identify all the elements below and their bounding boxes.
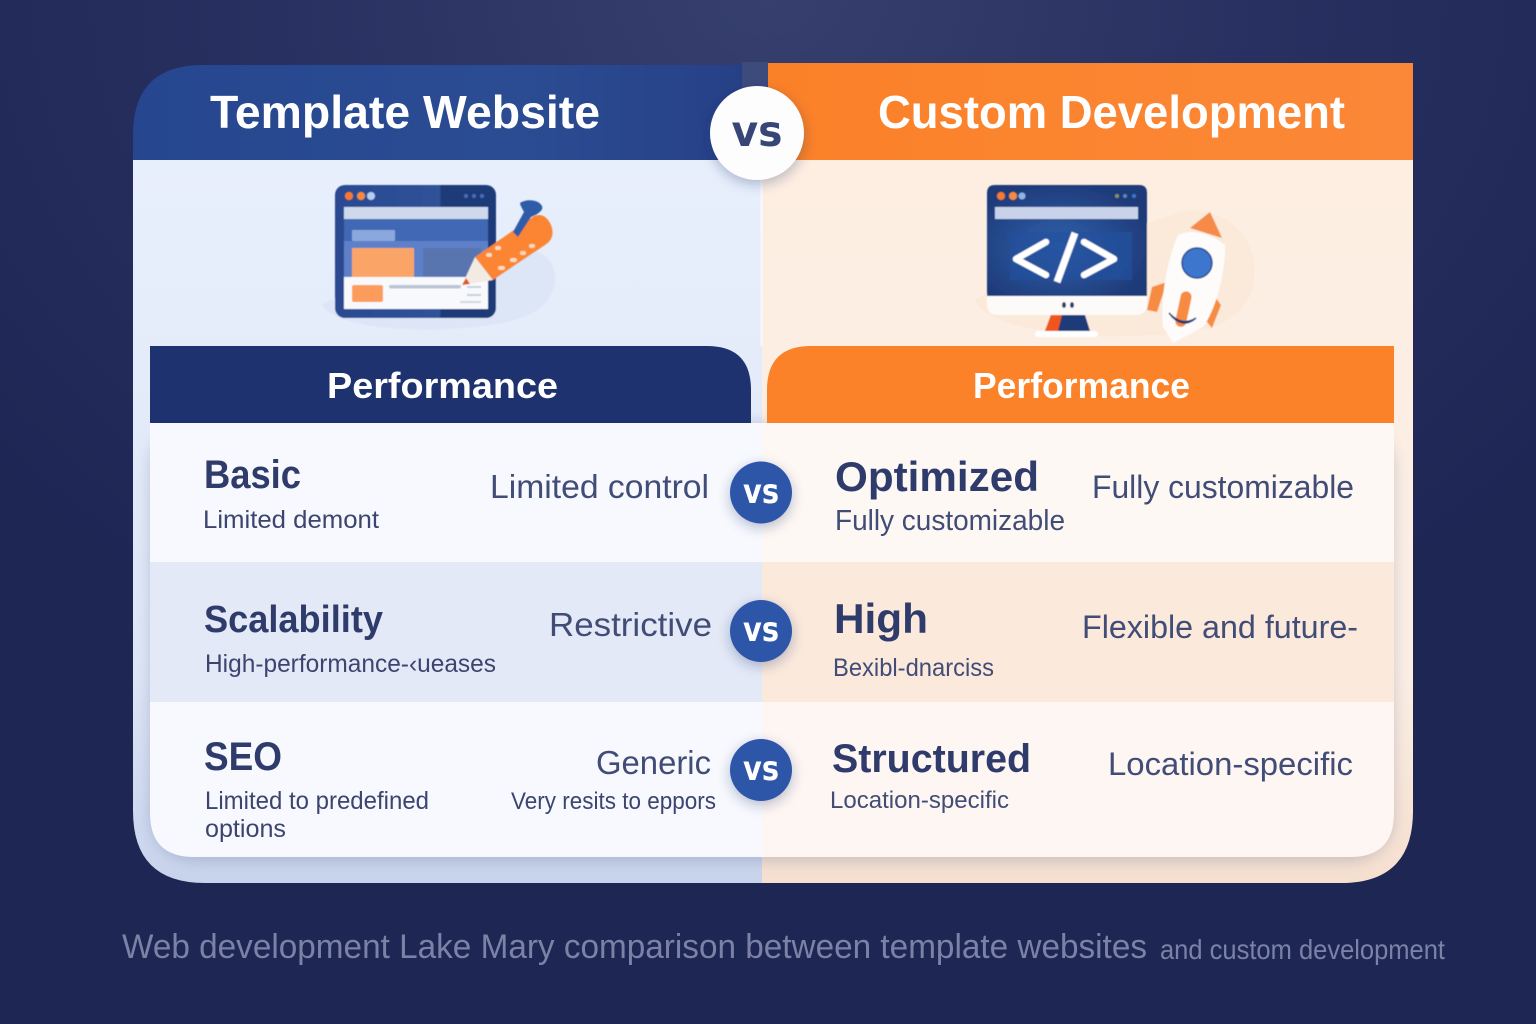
row background: optimized xyxy=(762,423,1394,562)
icon: code monitor and rocket xyxy=(975,185,1254,343)
row text: scalability: High-performance-‹ueases xyxy=(205,650,496,678)
row text: basic: Basic xyxy=(204,453,301,497)
row text: seo xyxy=(204,735,716,843)
label: performance left: Performance xyxy=(327,365,558,406)
left panel background xyxy=(133,160,762,883)
subheader: performance right xyxy=(767,346,1394,423)
row vs badge: performance: vs xyxy=(743,472,779,512)
row vs badge: seo: vs xyxy=(743,749,779,789)
row text: high: Flexible and future- xyxy=(1082,609,1358,645)
row background: high xyxy=(762,562,1394,702)
row text: scalability: Scalability xyxy=(204,599,383,641)
row text: structured: Location-specific xyxy=(1108,746,1353,782)
center seam xyxy=(760,160,763,346)
label: performance right: Performance xyxy=(973,365,1190,406)
row text: high xyxy=(833,595,1358,682)
header seam patch xyxy=(742,62,768,92)
row text: seo: Limited to predefined xyxy=(205,787,429,815)
row background: scalability xyxy=(150,562,762,702)
row text: high: Bexibl-dnarciss xyxy=(833,654,994,682)
left header band xyxy=(133,65,768,160)
row vs badge: performance xyxy=(730,462,792,524)
row vs badge: scalability xyxy=(730,600,792,662)
row text: optimized: Fully customizable xyxy=(1092,469,1354,505)
heading: custom development: Custom Development xyxy=(878,86,1345,138)
caption: and custom development xyxy=(1160,934,1445,965)
row text: structured: Location-specific xyxy=(830,787,1009,814)
right panel background xyxy=(762,160,1413,883)
row background: structured xyxy=(762,702,1394,857)
row text: basic: Limited control xyxy=(490,468,709,505)
comparison table shadow xyxy=(150,423,1394,861)
header vs badge xyxy=(710,86,804,180)
row background: basic xyxy=(150,423,762,562)
row text: optimized xyxy=(835,453,1354,537)
row text: basic xyxy=(203,453,709,534)
row text: seo: SEO xyxy=(204,735,282,779)
header vs badge: vs xyxy=(732,107,782,157)
panel: custom development xyxy=(762,63,1413,883)
row vs badge: scalability: vs xyxy=(743,610,779,650)
row text: structured xyxy=(830,737,1353,814)
row text: structured: Structured xyxy=(832,737,1031,781)
right header band xyxy=(768,63,1413,160)
caption: Web development Lake Mary comparison between template websites xyxy=(122,928,1147,966)
row vs badge: seo xyxy=(730,739,792,801)
row text: basic: Limited demont xyxy=(203,506,379,534)
row background: seo xyxy=(150,702,762,857)
row text: scalability xyxy=(204,599,712,678)
subheader: performance left xyxy=(150,346,751,423)
comparison rows right xyxy=(762,346,1394,857)
row text: optimized: Fully customizable xyxy=(835,505,1065,537)
row text: scalability: Restrictive xyxy=(549,606,712,643)
row text: seo: options xyxy=(205,815,286,843)
row text: high: High xyxy=(834,595,928,642)
row text: optimized: Optimized xyxy=(835,453,1039,500)
row text: seo: Very resits to eppors xyxy=(511,788,716,815)
heading: template website: Template Website xyxy=(210,86,600,138)
row text: seo: Generic xyxy=(596,744,711,781)
icon: browser window with pencil xyxy=(322,185,555,329)
panel: template website xyxy=(133,62,768,883)
comparison rows left xyxy=(150,346,762,857)
